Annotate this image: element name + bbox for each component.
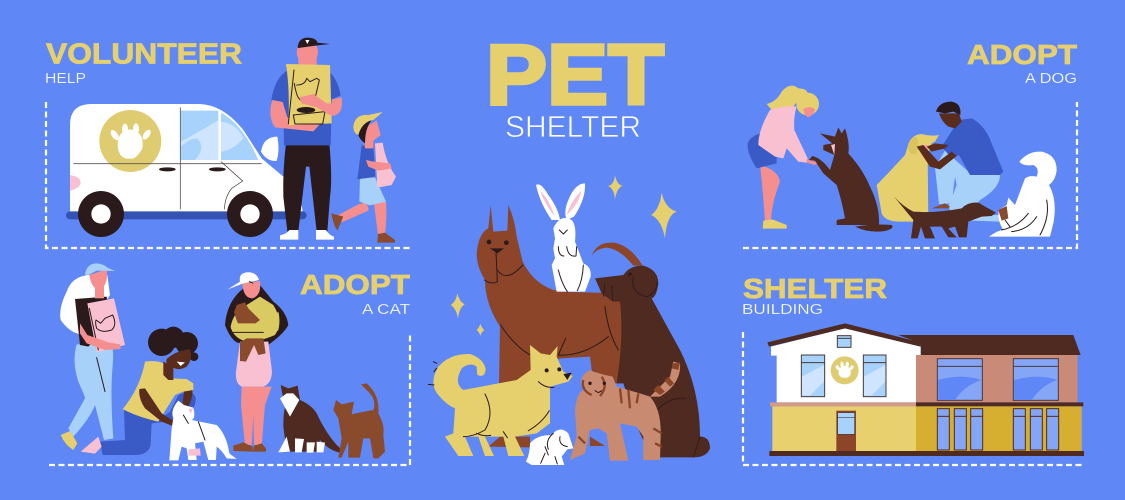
heading: adopt a cat: A CAT: [362, 301, 410, 318]
icon: paw logo: [831, 356, 859, 384]
icon: golden dog: [877, 134, 939, 222]
panel: volunteer help: [45, 38, 411, 248]
heading: volunteer: HELP: [45, 70, 86, 87]
heading: adopt a dog: [967, 39, 1077, 87]
title: PET: [486, 28, 664, 123]
illustration: people with cats: [60, 263, 385, 460]
heading: shelter building: BUILDING: [742, 301, 823, 318]
icon: brown cat: [333, 383, 385, 458]
icon: sparkles: [451, 175, 677, 336]
upper windows: [801, 336, 1058, 400]
person: woman with dog paw: [748, 86, 819, 229]
panel: adopt a cat: [49, 263, 410, 465]
illustration: people with dogs: [748, 86, 1057, 238]
icon: dachshund: [894, 197, 996, 238]
person: boy with pink bag: [331, 112, 396, 243]
person: woman with pink bag: [60, 263, 125, 450]
heading: adopt a dog: A DOG: [1025, 70, 1077, 87]
icon: paw: [109, 123, 152, 159]
title: SHELTER: [505, 109, 641, 144]
heading: adopt a cat: ADOPT: [300, 269, 410, 300]
heading: shelter building: [742, 273, 887, 318]
icon: rabbit: [536, 183, 591, 292]
person: volunteer man with food bag: [270, 38, 342, 240]
illustration: building: [767, 323, 1084, 456]
heading: volunteer: VOLUNTEER: [46, 38, 242, 70]
heading: adopt a dog: ADOPT: [967, 39, 1077, 70]
icon: small white rabbit: [526, 430, 573, 465]
icon: black and white cat: [278, 385, 343, 453]
icon: dark brown dog paw up: [809, 127, 892, 232]
icon: van: [66, 104, 307, 237]
heading: adopt a cat: [300, 269, 410, 318]
door: [836, 411, 856, 451]
lower windows: [937, 409, 1059, 450]
panel: shelter building: [742, 273, 1084, 465]
person: kneeling woman petting cat: [81, 327, 198, 455]
panel: center pet group: [428, 175, 710, 465]
panel: adopt a dog: [743, 39, 1077, 248]
icon: tan tabby cat: [570, 362, 680, 461]
heading: volunteer: [45, 38, 242, 87]
person: woman holding cat: [225, 272, 288, 452]
illustration: van and volunteers: [66, 38, 396, 243]
icon: tail and dark dog: [592, 243, 710, 457]
heading: shelter building: SHELTER: [743, 273, 887, 304]
icon: big brown dog: [477, 205, 623, 447]
icon: white cat: [169, 401, 237, 460]
person: man with dog: [917, 102, 1003, 222]
icon: white dog stretching: [989, 152, 1057, 237]
icon: yellow dog: [428, 345, 573, 456]
